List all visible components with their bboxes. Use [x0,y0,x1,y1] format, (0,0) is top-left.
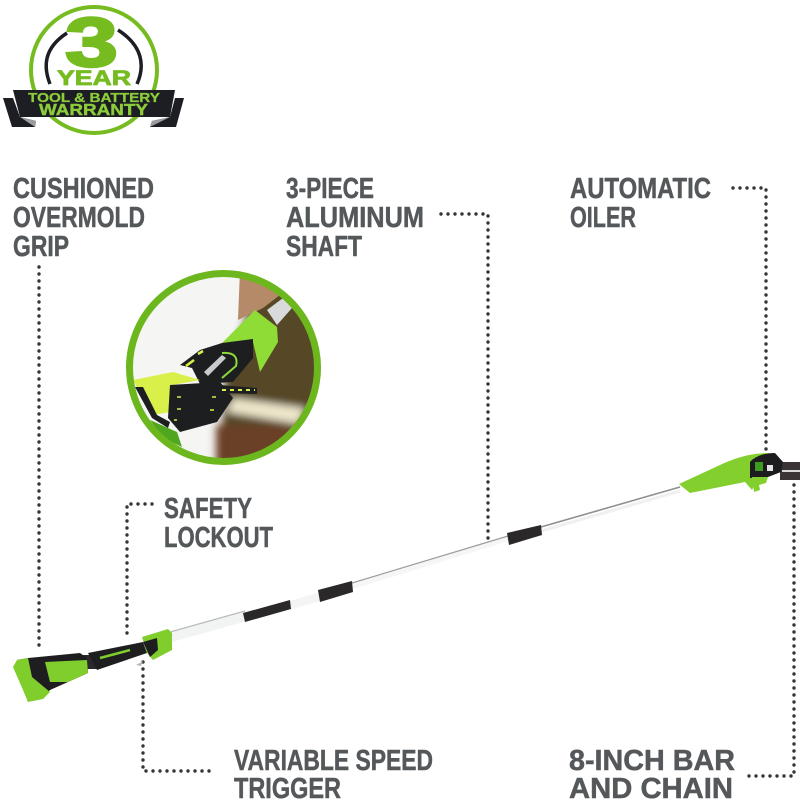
badge: 3 year warranty: 3 [65,3,118,81]
foam sleeves [243,600,291,622]
product: pole saw [13,453,800,702]
label: automatic oiler: AUTOMATIC [570,173,711,205]
motor housing [679,453,783,493]
label: 3-piece aluminum shaft: SHAFT [286,231,362,263]
label: cushioned overmold grip: OVERMOLD [13,202,145,234]
leader line: aluminum shaft [441,214,488,543]
label: variable speed trigger: VARIABLE SPEED [234,745,433,777]
label: safety lockout: LOCKOUT [164,522,273,554]
shaft [170,487,680,642]
label: cushioned overmold grip: CUSHIONED [13,173,154,205]
leader line: cushioned grip [37,267,41,650]
label: safety lockout: SAFETY [164,493,252,525]
leader line: variable speed trigger [143,662,215,771]
photo inset: gloved hand on grip [126,270,321,465]
label: 8-inch bar and chain [569,745,735,800]
badge: 3 year warranty: WARRANTY [39,102,149,119]
label: 8-inch bar and chain: 8-INCH BAR [569,745,735,777]
label: 3-piece aluminum shaft: ALUMINUM [286,202,424,234]
label: 3-piece aluminum shaft: 3-PIECE [286,173,374,205]
badge: 3 year warranty: YEAR [57,67,131,90]
leader line: automatic oiler [733,188,766,450]
label: cushioned overmold grip: GRIP [13,231,69,263]
badge: 3 year warranty: TOOL & BATTERY [28,90,160,105]
badge: 3 year warranty [3,3,184,133]
label: automatic oiler [570,173,711,234]
label: cushioned overmold grip [13,173,154,263]
leader line: bar and chain [742,485,794,776]
label: safety lockout [164,493,273,554]
chain bar [780,462,800,480]
label: 3-piece aluminum shaft [286,173,424,263]
label: automatic oiler: OILER [570,202,636,234]
label: variable speed trigger [234,745,433,800]
handle [13,629,172,702]
leader line: safety lockout [127,504,152,640]
